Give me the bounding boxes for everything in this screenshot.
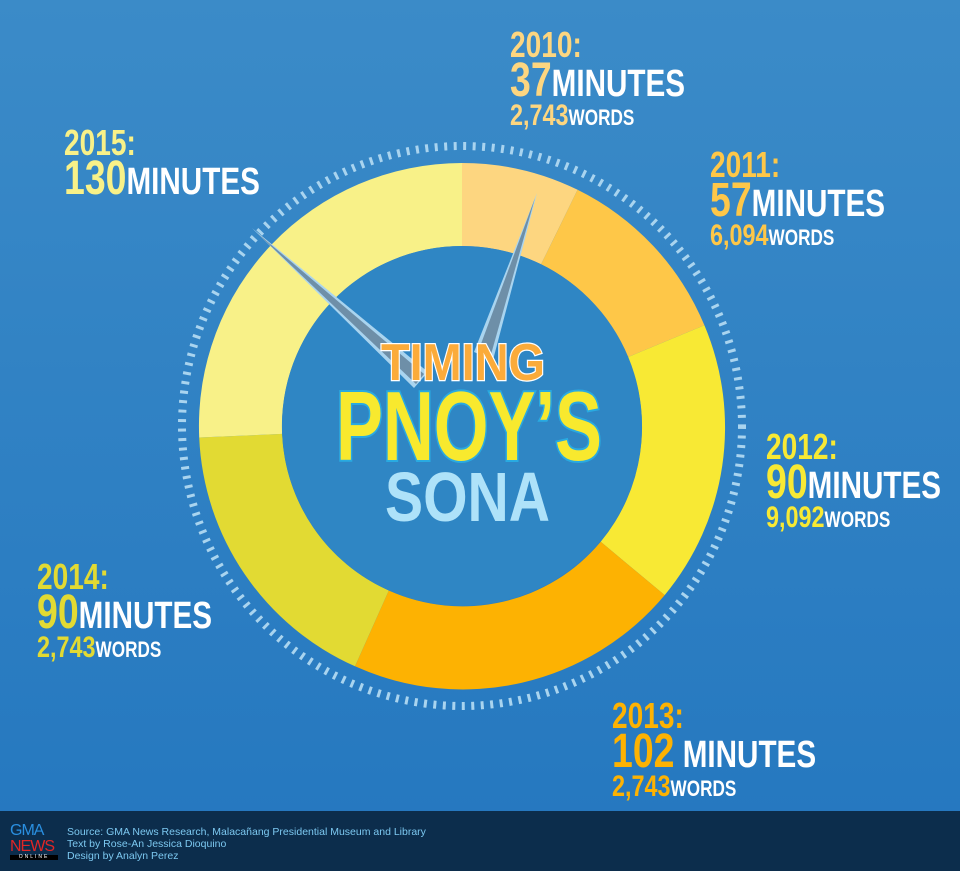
label 2013: 102 MINUTES	[612, 725, 816, 778]
logo: NEWS	[10, 838, 54, 855]
label 2015: 2015:	[64, 122, 136, 163]
label 2011	[710, 144, 885, 252]
logo: GMA	[10, 822, 43, 839]
clock hands	[252, 193, 537, 388]
label 2012: 9,092WORDS	[766, 501, 890, 534]
label 2013: 2,743WORDS	[612, 770, 736, 803]
label 2014	[37, 556, 212, 664]
credits: Design by Analyn Perez	[67, 850, 178, 862]
label 2012	[766, 426, 941, 534]
label 2010: 2010:	[510, 24, 582, 65]
label 2011: 2011:	[710, 144, 780, 185]
label 2010: 2,743WORDS	[510, 99, 634, 132]
credits: Source: GMA News Research, Malacañang Presidential Museum and Library	[67, 826, 426, 838]
label 2012: 2012:	[766, 426, 838, 467]
credits: Text by Rose-An Jessica Dioquino	[67, 838, 226, 850]
title	[336, 334, 602, 536]
label 2010: 37MINUTES	[510, 54, 685, 107]
tick ring	[182, 146, 742, 706]
credits	[67, 826, 426, 862]
label 2014: 2,743WORDS	[37, 631, 161, 664]
donut segments	[199, 163, 725, 689]
label 2013: 2013:	[612, 695, 684, 736]
label 2014: 90MINUTES	[37, 586, 212, 639]
label 2015	[64, 122, 260, 205]
logo: ONLINE	[19, 854, 49, 860]
label 2010	[510, 24, 685, 132]
footer	[0, 811, 960, 871]
title: TIMING	[381, 334, 545, 392]
label 2013	[612, 695, 816, 803]
label 2015: 130MINUTES	[64, 152, 260, 205]
label 2012: 90MINUTES	[766, 456, 941, 509]
logo	[10, 822, 58, 860]
label 2011: 6,094WORDS	[710, 219, 834, 252]
label 2014: 2014:	[37, 556, 109, 597]
label 2011: 57MINUTES	[710, 174, 885, 227]
title: SONA	[385, 458, 550, 536]
title: PNOY’S	[336, 371, 602, 481]
